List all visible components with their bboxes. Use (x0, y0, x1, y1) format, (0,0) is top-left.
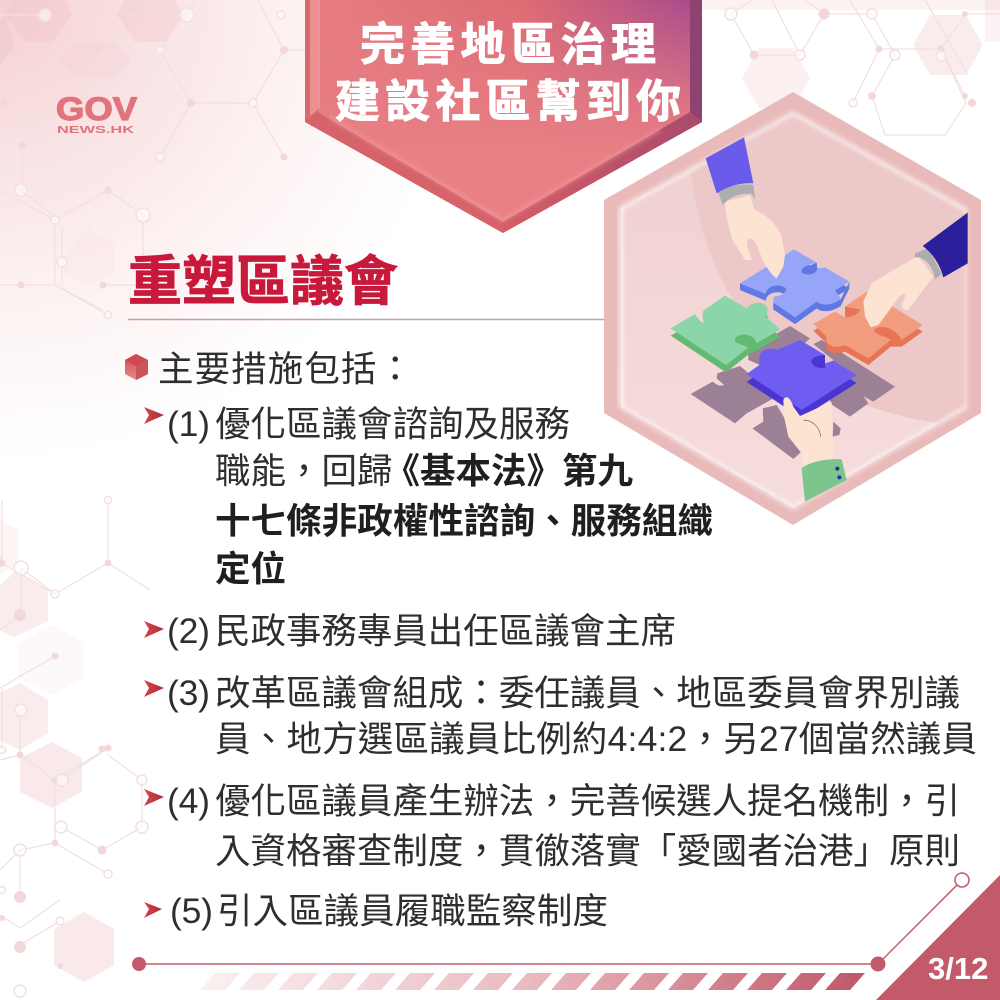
list item 1: 優化區議會諮詢及服務 (215, 404, 570, 444)
page number corner (876, 875, 1000, 1000)
list item 1: 十七條非政權性諮詢、服務組織 (215, 501, 713, 541)
page number corner: 3/12 (928, 951, 988, 986)
list item 2: (2) (167, 611, 210, 651)
puzzle piece: blue (740, 249, 849, 324)
panel: illustration hexagon with puzzle (604, 92, 981, 525)
heading: 重塑區議會 (128, 252, 398, 312)
puzzle piece: green (671, 296, 780, 372)
footer stripes (200, 973, 865, 990)
list item 4 (144, 781, 960, 871)
title (335, 19, 681, 127)
list item 1: 定位 (215, 549, 286, 589)
puzzle shadows (691, 326, 895, 459)
logo: GOV NEWS.HK: NEWS.HK (57, 124, 135, 136)
puzzle piece: purple (747, 340, 857, 418)
icon: right hand with navy sleeve (863, 213, 968, 327)
title: 完善地區治理 (360, 19, 656, 70)
list item 3: 改革區議會組成：委任議員、地區委員會界別議 (215, 673, 960, 713)
list item 5: 引入區議員履職監察制度 (217, 891, 608, 931)
list item 2: 民政事務專員出任區議會主席 (215, 611, 676, 651)
text: intro: 主要措施包括： (158, 349, 413, 389)
list item 4: 入資格審查制度，貫徹落實「愛國者治港」原則 (215, 831, 960, 871)
list item 3: (3) (167, 673, 210, 713)
icon: cube bullet (125, 354, 148, 380)
logo: GOV NEWS.HK (56, 91, 138, 136)
list item 1 (144, 404, 713, 589)
list item 3: 員、地方選區議員比例約4:4:2，另27個當然議員 (215, 719, 977, 759)
list item 1: (1) (167, 404, 210, 444)
list item 4: 優化區議員產生辦法，完善候選人提名機制，引 (215, 781, 960, 821)
puzzle piece: orange (813, 292, 923, 365)
list item 4: (4) (167, 781, 210, 821)
banner (305, 0, 702, 233)
list item 5: (5) (170, 891, 213, 931)
icon: top hand with purple sleeve (706, 137, 785, 278)
heading rule (128, 318, 604, 320)
list item 1: 職能，回歸《基本法》第九 (215, 451, 634, 491)
footer line with nodes (132, 873, 969, 972)
icon: bottom hand with green sleeve (783, 397, 847, 502)
list item 3 (144, 673, 977, 759)
title: 建設社區幫到你 (335, 76, 681, 127)
logo: GOV NEWS.HK: GOV (56, 91, 138, 127)
